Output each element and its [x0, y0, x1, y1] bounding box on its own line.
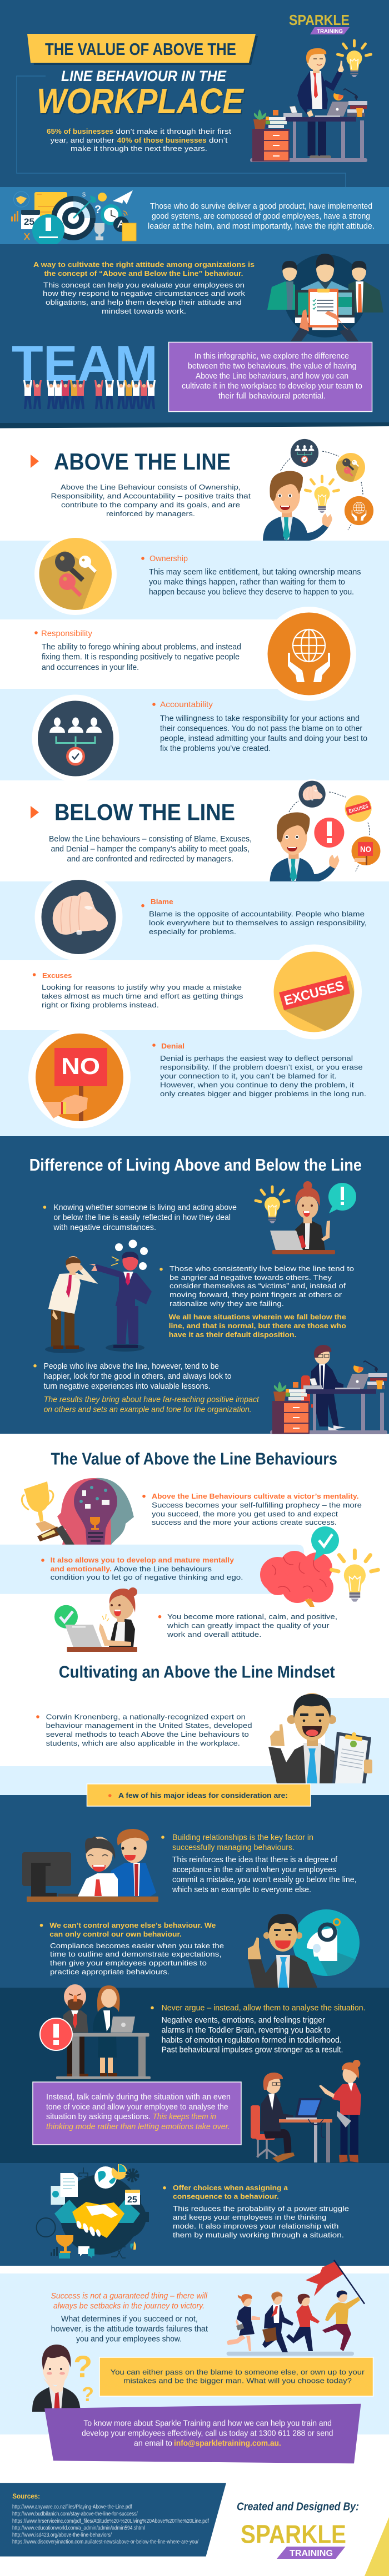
- panel: sources: http://www.educationworld.com/a_admin/admin/admin594.shtml: [12, 2525, 145, 2531]
- illustration: thinking man with question marks: ?: [73, 2349, 92, 2384]
- text: first difference point: with negative circumstances.: [53, 1223, 156, 1232]
- illustration: two smiling colleagues: [22, 1829, 158, 1902]
- illustration: three managers reviewing a checklist: [267, 254, 383, 341]
- text: survive description: leader at the helm, and most importantly, have the right attitude.: [148, 221, 375, 231]
- callout: what will you choose: You can either pass on the blame to someone else, or own up to your: [111, 2368, 365, 2376]
- text: never argue: habits of emotion regulation formed in toddlerhood.: [162, 2035, 342, 2045]
- panel: sources: [0, 2483, 226, 2557]
- text: accountability: fix the problems you’ve created.: [160, 744, 271, 753]
- text: blame: Blame is the opposite of accountability. People who blame: [149, 910, 365, 918]
- panel: difference section: [0, 1136, 389, 1434]
- text: ownership: Ownership: [149, 554, 188, 563]
- text: below the line description: and are confronted and redirected by managers.: [67, 854, 233, 864]
- credit: created and designed by: Created and Designed By:: [237, 2501, 359, 2513]
- icon: excuses sign: [267, 945, 362, 1039]
- text: offer choices: consequence to a behaviour.: [173, 2192, 279, 2200]
- text: never argue: Never argue – instead, allow them to analyse the situation.: [162, 2003, 366, 2013]
- heading: cultivating: Cultivating an Above the Line Mindset: [59, 1662, 335, 1682]
- panel: sources: http://www.isd423.org/above-the-line-behaviors/: [12, 2532, 112, 2538]
- text: second difference point: have it as their default disposition.: [169, 1330, 297, 1339]
- panel: accountability: [0, 689, 389, 782]
- text: control own behaviour: [40, 1921, 224, 1976]
- text: third difference point: People who live above the line, however, tend to be: [44, 1362, 219, 1371]
- text: third difference point: happier, look for the good in others, and always look to: [44, 1372, 231, 1381]
- text: second difference point: moving forward, they point fingers at others or: [169, 1290, 342, 1299]
- text: building relationships: commit a mistake, you won’t easily go below the line,: [172, 1875, 357, 1884]
- text: intro statistic: [47, 127, 231, 153]
- text: below the line description: [49, 834, 252, 864]
- icon: no sign: [28, 1026, 131, 1128]
- text: above the line description: Responsibility, and Accountability – positive traits that: [51, 492, 251, 500]
- text: offer choices: [163, 2184, 349, 2239]
- icon: team accountability: [32, 695, 119, 782]
- panel: mature mentally band: [0, 1545, 304, 1594]
- text: control own behaviour: We can’t control anyone else’s behaviour. We: [49, 1921, 216, 1929]
- text: survive description: good systems, are composed of good employees, have a strong: [152, 211, 370, 221]
- text: intro statistic: make it through the next three years.: [71, 144, 207, 153]
- text: concept description: This concept can help you evaluate your employees on: [43, 281, 245, 289]
- text: offer choices: Offer choices when assigning a: [173, 2184, 288, 2192]
- text: offer choices: them by mutually working through a situation.: [173, 2231, 344, 2239]
- text: concept description: how they respond to negative circumstances and work: [43, 289, 246, 298]
- text: control own behaviour: Compliance becomes easier when you take the: [50, 1942, 224, 1950]
- callout: talk calmly: thinking mode rather than letting emotions take over.: [46, 2122, 230, 2131]
- icon: keys: [34, 533, 117, 615]
- text: rational and calm: which can greatly impact the quality of your: [167, 1621, 330, 1630]
- title: THE VALUE OF ABOVE THE: [45, 39, 236, 59]
- text: success statement: What determines if you succeed or not,: [61, 2315, 198, 2323]
- text: victor's mentality: success and the more your actions create success.: [152, 1518, 337, 1526]
- text: survive description: Those who do survive deliver a good product, have implemented: [150, 201, 372, 211]
- panel: denial: [0, 1026, 389, 1136]
- text: never argue: [151, 2003, 366, 2055]
- text: first difference point: Knowing whether someone is living and acting above: [53, 1203, 237, 1212]
- text: victor's mentality: Success becomes your self-fulfilling prophecy – the more: [152, 1501, 362, 1509]
- text: below the line description: and Denial – hamper the company’s ability to meet goals,: [51, 844, 250, 854]
- text: second difference point: line, and that is normal, but there are those who: [169, 1322, 346, 1330]
- text: responsibility: fixing them. It is responding positively to negative people: [42, 652, 240, 662]
- text: offer choices: and keeps your employees in the thinking: [173, 2213, 327, 2221]
- text: rational and calm: work and overall attitude.: [167, 1630, 261, 1639]
- illustration: brain with check and bulb: [260, 1526, 378, 1607]
- text: second difference point: consider themselves as “victims” and, instead of: [169, 1282, 346, 1290]
- panel: sources: http://www.budbilanich.com/stay-above-the-line-for-success/: [12, 2511, 138, 2517]
- text: blame: [141, 898, 367, 936]
- text: concept heading: A way to cultivate the right attitude among organizations is: [33, 260, 255, 269]
- panel: sources: Sources:: [12, 2492, 40, 2500]
- callout: contact banner: [44, 2404, 361, 2463]
- callout: contact banner: develop your employees effectively, call us today at 1300 611 288 or send: [82, 2429, 333, 2438]
- icon: pointing fist: [34, 873, 122, 961]
- illustration: businessman at desk with light bulb: [250, 41, 371, 162]
- panel: Corwin Kronenberg: [0, 1693, 389, 1796]
- text: concept description: mindset towards work.: [102, 307, 186, 315]
- text: success statement: however, is the attitude towards failures that: [51, 2325, 208, 2333]
- title: WORKPLACE: [38, 82, 246, 122]
- text: rational and calm: [158, 1612, 337, 1639]
- heading: value of above the line: The Value of Above the Line Behaviours: [51, 1449, 337, 1469]
- illustration: cartoon manager with three trait icons: [263, 439, 373, 541]
- heading: above the line: ABOVE THE LINE: [54, 448, 231, 475]
- callout: talk calmly: [33, 2082, 241, 2145]
- text: excuses: Looking for reasons to justify why you made a mistake: [42, 983, 242, 991]
- panel: responsibility: [34, 607, 389, 701]
- logo: Sparkle Training: TRAINING: [317, 29, 343, 34]
- text: building relationships: which sets an example to everyone else.: [172, 1885, 311, 1894]
- text: Corwin: students, which are also applicable in the workplace.: [46, 1739, 240, 1747]
- text: never argue: Past behavioural impulses grow stronger as a result.: [162, 2045, 343, 2055]
- illustration: team running behind a flag: [227, 2260, 365, 2356]
- icon: no sign: NO: [61, 1053, 100, 1079]
- text: responsibility: The ability to forego whining about problems, and instead: [42, 642, 241, 652]
- panel: offer choices section: [0, 2163, 389, 2266]
- callout: talk calmly: situation by asking questions.: [46, 2112, 151, 2121]
- illustration: cartoon manager with warning icons: [270, 779, 380, 882]
- icon: excuses sign: EXCUSES: [283, 978, 346, 1009]
- text: above the line description: contribute to the company and its goals, and are: [61, 501, 240, 509]
- credit: created and designed by: [237, 2501, 359, 2559]
- text: control own behaviour: practice appropriate behaviours.: [50, 1968, 169, 1976]
- text: blame: especially for problems.: [149, 927, 236, 936]
- icon: business collage: [11, 190, 136, 246]
- text: mature mentally: It also allows you to develop and mature mentally: [51, 1556, 235, 1564]
- panel: excuses: [33, 945, 389, 1039]
- illustration: expert with clipboard: [268, 1693, 372, 1783]
- panel: closing section: [0, 2260, 389, 2434]
- text: third difference point: on others and sets an example and tone for the organization.: [44, 1405, 252, 1414]
- illustration: thinking man with question marks: [32, 2345, 94, 2412]
- text: blame: Blame: [151, 898, 173, 906]
- text: ownership: you make things happen, rather than waiting for them to: [149, 577, 345, 587]
- callout: contact banner: info@sparkletraining.com.au.: [174, 2439, 281, 2448]
- illustration: thinking man with question marks: ?: [82, 2383, 94, 2406]
- text: intro statistic: don’t: [209, 136, 228, 144]
- text: control own behaviour: then give your employees opportunities to: [50, 1959, 207, 1967]
- callout: infographic intro: between the two behaviours, the value of having: [188, 361, 357, 371]
- credit: created and designed by: TRAINING: [290, 2549, 333, 2558]
- text: control own behaviour: time to outline and demonstrate expectations,: [50, 1950, 222, 1958]
- text: excuses: takes almost as much time and effort as getting things: [42, 992, 243, 1000]
- text: second difference point: be angrier ad negative towards others. They: [169, 1273, 332, 1282]
- text: second difference point: rationalize why they are failing.: [169, 1299, 284, 1308]
- text: never argue: alarms in the Toddler Brain, reverting you back to: [162, 2025, 331, 2035]
- text: Corwin: behaviour management in the United States, developed: [46, 1721, 252, 1730]
- text: building relationships: acceptance in the air and when your employees: [172, 1865, 336, 1874]
- illustration: manager with thinking head: [248, 1909, 360, 1988]
- text: blame: look everywhere but to themselves to assign responsibility,: [149, 919, 367, 927]
- callout: major ideas: A few of his major ideas for consideration are:: [118, 1791, 288, 1799]
- text: mature mentally: [41, 1556, 243, 1581]
- text: concept description: obligations, and help them develop their attitude and: [46, 298, 242, 306]
- title: [27, 34, 258, 122]
- text: second difference point: [159, 1264, 354, 1339]
- logo: Sparkle Training: [289, 12, 350, 34]
- text: accountability: Accountability: [160, 700, 213, 709]
- logo: Sparkle Training: SPARKLE: [289, 12, 350, 28]
- illustration: employee working at desk: [270, 1345, 387, 1434]
- text: success statement: always be setbacks in the journey to victory.: [53, 2301, 205, 2311]
- text: offer choices: mode. It also improves your relationship with: [173, 2222, 338, 2230]
- text: first difference point: or below the line is easily reflected in how they deal: [53, 1213, 231, 1222]
- panel: sources: http://www.anyware.co.nz/files/Playing-Above-the-Line.pdf: [12, 2504, 132, 2510]
- callout: infographic intro: [169, 342, 372, 412]
- callout: infographic intro: their full behavioural potential.: [218, 391, 326, 401]
- panel: sources: https://www.hrserviceinc.com/pdf_files/Attitude%20-%20Living%20Above%20The%20Line.pdf: [12, 2518, 209, 2524]
- text: Corwin: Corwin Kronenberg, a nationally-recognized expert on: [46, 1713, 246, 1721]
- text: above the line description: Above the Line Behaviour consists of Ownership,: [61, 483, 241, 491]
- text: denial: [152, 1042, 366, 1098]
- text: accountability: their consequences. You do not pass the blame on to other: [160, 724, 362, 733]
- text: Corwin: several methods to teach Above the Line behaviours to: [46, 1730, 249, 1738]
- text: building relationships: successfully managing behaviours.: [172, 1843, 295, 1852]
- text: concept description: [43, 281, 246, 315]
- illustration: handshake over gear: [37, 2164, 149, 2259]
- text: denial: only creates bigger and bigger problems in the long run.: [160, 1090, 366, 1098]
- text: success statement: you and your employees show.: [76, 2335, 182, 2343]
- text: control own behaviour: can only control our own behaviour.: [49, 1930, 182, 1938]
- text: ownership: happen because you believe they deserve to happen to you.: [149, 587, 354, 597]
- text: intro statistic: 65% of businesses: [47, 127, 113, 135]
- text: excuses: Excuses: [42, 971, 72, 980]
- text: concept heading: the concept of “Above and Below the Line” behaviour.: [44, 269, 243, 278]
- text: denial: your connection to it, you can’t be blamed for it.: [160, 1072, 337, 1080]
- panel: survive band: [0, 187, 389, 246]
- text: building relationships: [161, 1833, 357, 1894]
- text: responsibility: [34, 629, 241, 672]
- title: LINE BEHAVIOUR IN THE: [61, 68, 227, 84]
- callout: contact banner: To know more about Sparkle Training and how we can help you train and: [83, 2419, 332, 2428]
- callout: what will you choose: [99, 2357, 373, 2396]
- callout: infographic intro: cultivate it in the workplace to develop your team to: [182, 381, 362, 391]
- illustration: cartoon manager with warning icons: NO: [360, 845, 371, 854]
- callout: contact banner: an email to: [134, 2439, 172, 2448]
- text: intro statistic: don’t make it through their first: [116, 127, 231, 135]
- text: above the line description: [51, 483, 251, 518]
- callout: infographic intro: In this infographic, we explore the difference: [194, 351, 349, 361]
- text: responsibility: Responsibility: [41, 629, 92, 638]
- icon: business collage: ?: [94, 204, 101, 216]
- text: third difference point: [33, 1362, 260, 1414]
- text: above the line description: reinforced by managers.: [106, 510, 195, 518]
- text: intro statistic: 40% of those businesses: [117, 136, 207, 144]
- illustration: trophy and heads with ideas: [22, 1478, 134, 1545]
- callout: talk calmly: tone of voice and allow your employee to analyse the: [46, 2103, 228, 2111]
- text: mature mentally: and emotionally.: [51, 1565, 112, 1573]
- text: responsibility: and occurrences in your life.: [42, 663, 139, 672]
- text: Corwin: [36, 1713, 252, 1747]
- text: excuses: [33, 971, 243, 1009]
- text: success statement: Success is not a guaranteed thing – there will: [51, 2291, 208, 2301]
- text: success statement: [51, 2291, 208, 2343]
- graphic: TEAM letters lifted by people: TEAM: [12, 336, 158, 392]
- panel: sources: https://www.discoveryinaction.com.au/latest-news/above-or-below-the-line-where-are-you/: [12, 2539, 198, 2545]
- icon: business collage: $: [82, 191, 86, 198]
- text: victor's mentality: you succeed, the more you get used to and expect: [152, 1510, 338, 1518]
- text: offer choices: This reduces the probability of a power struggle: [173, 2205, 349, 2212]
- heading: below the line: BELOW THE LINE: [54, 799, 235, 825]
- text: mature mentally: Above the Line behaviours: [113, 1565, 212, 1573]
- illustration: handshake over gear: 25: [127, 2195, 137, 2205]
- panel: ownership: [0, 533, 389, 619]
- panel: hero background: [0, 0, 389, 187]
- text: building relationships: Building relationships is the key factor in: [172, 1833, 313, 1842]
- text: third difference point: The results they bring about have far-reaching positive impact: [44, 1395, 260, 1404]
- text: intro statistic: year, and another: [51, 136, 114, 144]
- text: survive description: [148, 201, 375, 231]
- callout: infographic intro: Above the Line behaviours, and how you can: [196, 371, 348, 381]
- text: denial: Denial is perhaps the easiest way to deflect personal: [160, 1054, 353, 1062]
- panel: concept and team section: [0, 244, 389, 429]
- panel: blame: [0, 873, 389, 961]
- text: second difference point: We all have situations wherein we fall below the: [169, 1313, 346, 1321]
- text: third difference point: turn negative experiences into valuable lessons.: [44, 1382, 211, 1391]
- illustration: angry manager pointing at employee: [45, 1240, 152, 1353]
- callout: what will you choose: mistakes and be the bigger man. What will you choose today?: [123, 2377, 352, 2385]
- text: mature mentally: condition you to let go of negative thinking and ego.: [51, 1573, 243, 1581]
- title: WORKPLACE: [37, 81, 245, 121]
- illustration: employee at laptop and manager: [251, 2060, 361, 2162]
- text: denial: Denial: [161, 1042, 184, 1050]
- text: first difference point: [43, 1203, 237, 1232]
- icon: globe in hands: [262, 607, 356, 701]
- text: accountability: The willingness to take responsibility for your actions and: [160, 714, 360, 723]
- callout: major ideas: [87, 1784, 311, 1806]
- text: rational and calm: You become more rational, calm, and positive,: [167, 1612, 337, 1621]
- text: victor's mentality: [142, 1492, 362, 1526]
- icon: business collage: 25: [24, 216, 34, 227]
- callout: talk calmly: This keeps them in: [153, 2112, 216, 2121]
- text: concept heading: [33, 260, 255, 278]
- text: denial: However, when you continue to deny the problem, it: [160, 1081, 354, 1089]
- illustration: cartoon manager with warning icons: EXCUSES: [348, 803, 369, 814]
- text: second difference point: Those who consistently live below the line tend to: [169, 1264, 354, 1273]
- text: victor's mentality: Above the Line Behaviours cultivate a victor’s mentality.: [152, 1492, 359, 1500]
- illustration: woman with laptop and bright idea: [256, 1181, 356, 1254]
- text: building relationships: This reinforces the idea that there is a degree of: [172, 1855, 338, 1864]
- illustration: woman celebrating at laptop: [54, 1587, 137, 1652]
- text: excuses: right or fixing problems instead.: [42, 1001, 159, 1009]
- callout: talk calmly: Instead, talk calmly during the situation with an even: [46, 2093, 231, 2101]
- text: never argue: Negative events, emotions, and feelings trigger: [162, 2015, 325, 2025]
- panel: major ideas section: [0, 1784, 389, 1988]
- text: accountability: people, instead admitting your faults and doing your best to: [160, 734, 367, 743]
- illustration: two coworkers at a standing desk with alert: [40, 1984, 151, 2079]
- text: denial: responsibility. If the problem doesn’t exist, or you erase: [160, 1063, 363, 1071]
- text: accountability: [152, 700, 367, 753]
- text: ownership: [141, 554, 361, 597]
- credit: created and designed by: SPARKLE: [241, 2520, 346, 2549]
- panel: never argue section: [0, 1984, 389, 2163]
- text: below the line description: Below the Line behaviours – consisting of Blame, Excuses,: [49, 834, 252, 844]
- text: ownership: This may seem like entitlement, but taking ownership means: [149, 567, 361, 577]
